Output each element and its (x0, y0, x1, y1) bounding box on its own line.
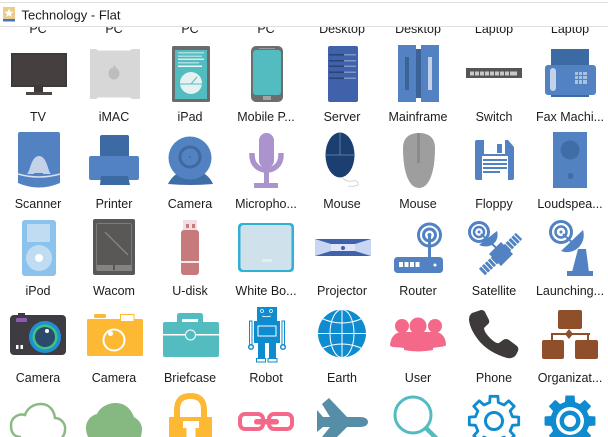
label: Loudspeaker: Loudspea... (537, 197, 603, 211)
icon: iMAC (90, 49, 140, 99)
icon: mainframe (398, 45, 439, 102)
label: Mouse: Mouse (323, 197, 361, 211)
icon: dark camera (10, 313, 66, 355)
icon: server (328, 46, 358, 102)
icon: loudspeaker (553, 132, 587, 188)
icon: robot (249, 307, 285, 362)
label: TV: TV (30, 110, 47, 124)
label: Launching Station: Launching... (536, 284, 604, 298)
icon: user group (390, 318, 446, 352)
icon: switch (466, 68, 522, 78)
title bar (0, 0, 608, 27)
clipped top row labels: PC (181, 22, 199, 36)
clipped top row labels: PC (29, 22, 47, 36)
icon: filled gear (545, 396, 595, 437)
icon: organization chart (542, 310, 598, 359)
clipped top row labels: PC (105, 22, 123, 36)
label: Router: Router (399, 284, 437, 298)
icon: microphone (252, 133, 281, 188)
label: Phone: Phone (476, 371, 512, 385)
label: User: User (405, 371, 431, 385)
icon: fax machine (545, 49, 596, 97)
label: Fax Machine: Fax Machi... (536, 110, 604, 124)
icon: iPad (172, 46, 210, 102)
label: Mouse: Mouse (399, 197, 437, 211)
clipped top row labels: Desktop (395, 22, 441, 36)
icon: padlock (169, 396, 212, 437)
label: Briefcase: Briefcase (164, 371, 216, 385)
icon: Wacom tablet (93, 219, 135, 275)
label: iPad: iPad (177, 110, 203, 124)
label: White Board: White Bo... (235, 284, 297, 298)
icon: airplane (317, 398, 368, 437)
icon: library star badge (3, 7, 15, 22)
label: Switch: Switch (476, 110, 512, 124)
label: Robot: Robot (249, 371, 283, 385)
clipped top row labels: PC (257, 22, 275, 36)
label: Camera: Camera (16, 371, 60, 385)
icon: filled cloud (86, 403, 142, 437)
label: Organization: Organizat... (538, 371, 602, 385)
label: Camera: Camera (168, 197, 212, 211)
label: Scanner: Scanner (15, 197, 61, 211)
icon: outlined gear (469, 396, 519, 437)
icon: floppy disk (475, 140, 514, 180)
label: Wacom: Wacom (93, 284, 135, 298)
icon: gray mouse (403, 133, 435, 188)
clipped top row labels (29, 22, 589, 36)
icon: mobile phone (251, 46, 283, 102)
clipped top row labels: Desktop (319, 22, 365, 36)
clipped top row labels: Laptop (551, 22, 589, 36)
icon: phone handset (469, 310, 518, 358)
label: Microphone: Micropho... (235, 197, 297, 211)
icon: satellite (470, 222, 519, 272)
icon: launching station (550, 222, 593, 276)
label: Mobile Phone: Mobile P... (237, 110, 295, 124)
icon: TV (11, 53, 67, 95)
label: Printer: Printer (96, 197, 132, 211)
heading: Technology - Flat (22, 8, 121, 22)
icon: yellow camera (87, 314, 143, 356)
icon: briefcase (163, 313, 219, 357)
label: Satellite: Satellite (472, 284, 516, 298)
label: Projector: Projector (317, 284, 367, 298)
icon: USB disk (181, 220, 199, 275)
icon: projector (315, 239, 371, 256)
icon: printer (89, 135, 139, 185)
icon: dark mouse (326, 132, 358, 186)
label: Mainframe: Mainframe (388, 110, 448, 124)
icon: iPod (22, 220, 56, 276)
clipped top row labels: Laptop (475, 22, 513, 36)
label: Camera: Camera (92, 371, 136, 385)
icon: chain link (240, 414, 292, 429)
label: iMAC: iMAC (99, 110, 129, 124)
icon: magnifier (395, 397, 440, 437)
label: Earth: Earth (327, 371, 357, 385)
icon: outlined cloud (11, 404, 65, 437)
icon: router (394, 224, 443, 273)
icon: scanner (18, 132, 60, 188)
icon: web camera (168, 136, 213, 185)
icon: white board (238, 223, 294, 272)
label: Server: Server (324, 110, 360, 124)
label: U-disk: U-disk (172, 284, 208, 298)
icon: earth (318, 310, 366, 358)
label: iPod: iPod (25, 284, 51, 298)
label: Floppy: Floppy (475, 197, 514, 211)
